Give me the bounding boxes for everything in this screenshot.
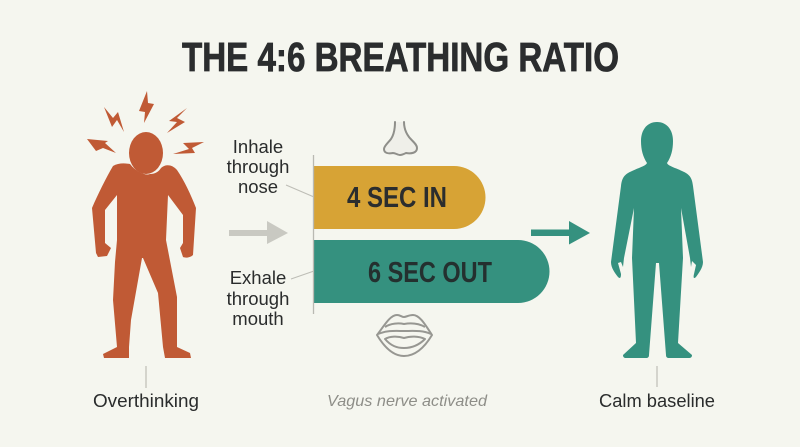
icon: mouth [377, 315, 432, 356]
bar: 6 sec out: 6 SEC OUT [368, 257, 492, 289]
text: inhale through nose: Inhale [233, 136, 283, 157]
panel: overthinking figure [87, 91, 204, 411]
leader lines to bars [286, 185, 314, 279]
panel: calm figure [599, 122, 715, 411]
icon: nose [384, 122, 417, 155]
icon: calm human silhouette [611, 122, 703, 358]
text: exhale through mouth [227, 267, 289, 329]
icon: tense human silhouette [92, 132, 196, 358]
bar: 4 sec in: 4 SEC IN [347, 182, 447, 214]
leader line [145, 366, 147, 388]
axis line [312, 155, 314, 314]
caption: vagus nerve activated: Vagus nerve activated [327, 393, 488, 410]
text: inhale through nose: through [227, 156, 289, 177]
arrow: teal [531, 221, 590, 244]
bar: 6 sec out [314, 240, 550, 303]
arrow: grey [229, 221, 288, 244]
text: exhale through mouth: mouth [232, 308, 284, 329]
label: calm baseline: Calm baseline [599, 391, 715, 411]
bar: 4 sec in [314, 166, 486, 229]
label: overthinking: Overthinking [93, 391, 199, 411]
panel: breathing bars [314, 155, 550, 314]
title: THE 4:6 BREATHING RATIO [182, 34, 619, 80]
text: exhale through mouth: Exhale [230, 267, 286, 288]
text: inhale through nose [227, 136, 289, 197]
text: exhale through mouth: through [227, 288, 289, 309]
leader line [656, 366, 658, 387]
icon: stress bolts [87, 91, 204, 154]
text: inhale through nose: nose [238, 176, 278, 197]
